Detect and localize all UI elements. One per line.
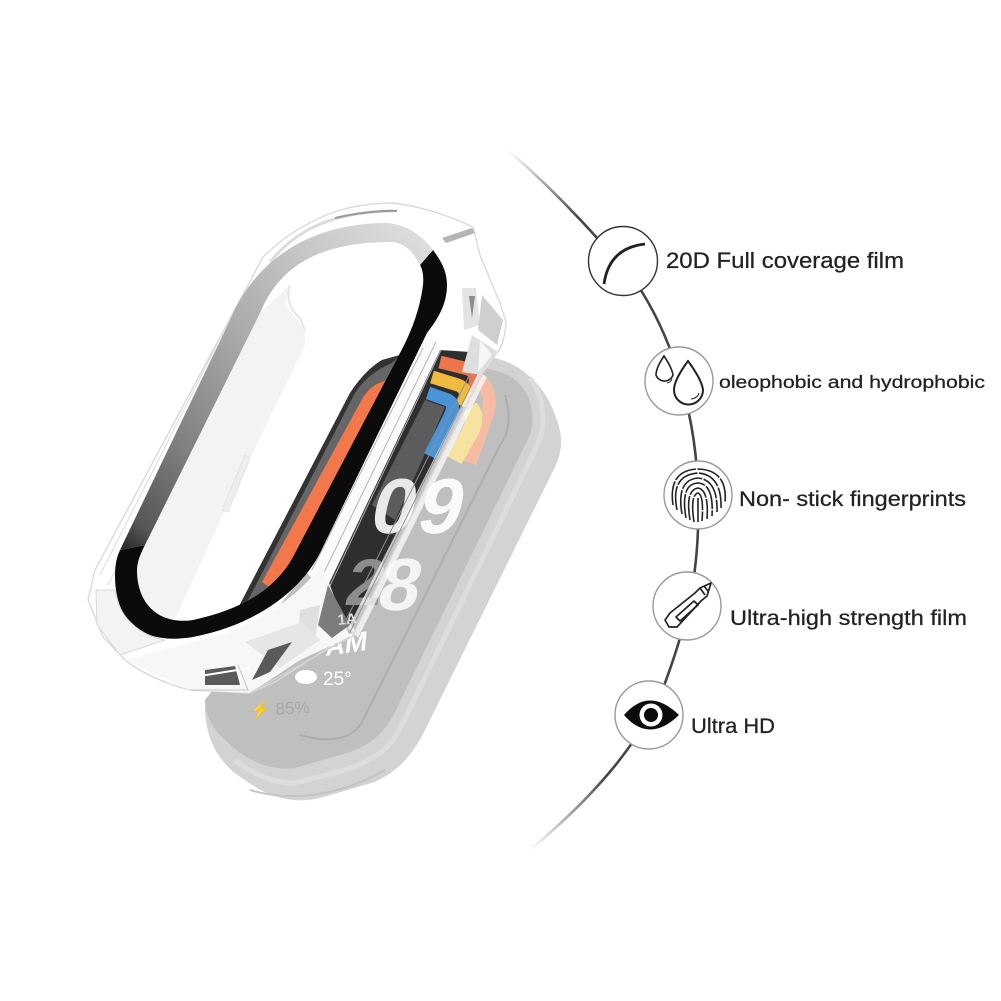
smartwatch band behind case xyxy=(205,357,561,800)
watch face readings: AM xyxy=(324,625,369,662)
feature: oleophobic xyxy=(645,347,985,415)
icon: eye xyxy=(624,700,679,730)
watch face readings: 25° xyxy=(323,669,352,690)
icon: water drops xyxy=(656,356,703,404)
feature: ultra HD: Ultra HD xyxy=(691,714,775,738)
feature: fingerprints: Non- stick fingerprints xyxy=(739,487,966,511)
bottom faceted corner: 1A xyxy=(337,610,358,629)
icon: fingerprint xyxy=(672,469,725,522)
feature: 20D coverage xyxy=(588,226,904,296)
feature: strength xyxy=(653,572,967,640)
case outline xyxy=(88,203,506,693)
feature: strength: Ultra-high strength film xyxy=(730,606,967,630)
screen seen through glass xyxy=(236,355,405,612)
top bezel highlight xyxy=(100,211,475,585)
watch face readings: ⚡ 85% xyxy=(249,697,310,721)
watch screen seen through case rim: 0 xyxy=(363,462,428,550)
icon: curved film xyxy=(604,244,645,284)
watch face readings xyxy=(249,462,475,721)
glass window xyxy=(137,284,399,620)
curved timeline arc xyxy=(508,150,698,850)
black glass border xyxy=(115,250,447,639)
light reflections xyxy=(130,285,305,630)
case right rim xyxy=(306,333,487,638)
feature: 20D coverage: 20D Full coverage film xyxy=(666,248,904,273)
feature: ultra HD xyxy=(615,681,775,749)
bottom faceted corner xyxy=(96,565,358,693)
watch face readings: 9 xyxy=(410,462,475,550)
top-right facet corner xyxy=(462,288,503,375)
watch screen seen through case rim: 2 xyxy=(340,547,392,620)
watch face readings: 8 xyxy=(372,543,430,626)
silver glass border xyxy=(120,223,433,550)
feature: fingerprints xyxy=(664,461,966,529)
feature: oleophobic: oleophobic and hydrophobic xyxy=(719,372,985,392)
watch face peach and yellow arcs xyxy=(454,380,489,463)
watch screen seen through case rim xyxy=(325,350,484,630)
icon: utility knife xyxy=(665,583,711,627)
